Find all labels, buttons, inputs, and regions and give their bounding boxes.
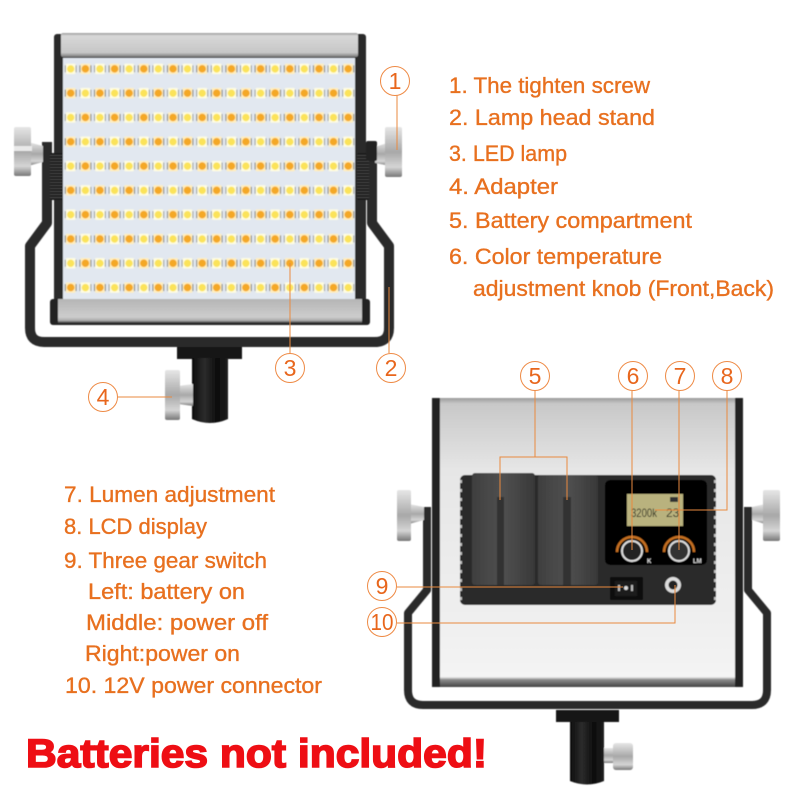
callout 4: 4 <box>97 384 110 410</box>
parts list 7 to 10: Left: battery on <box>88 579 245 604</box>
callout 6: 6 <box>627 363 639 389</box>
battery 2 <box>538 475 598 585</box>
back panel <box>432 398 743 687</box>
batteries warning: Batteries not included! <box>26 732 487 776</box>
scalloped box edges <box>461 480 715 600</box>
callout 6 <box>618 362 648 390</box>
parts list 1 to 6 <box>449 73 774 301</box>
three gear switch <box>610 577 643 600</box>
callout 9 <box>368 572 396 600</box>
callout 2: 2 <box>385 355 397 381</box>
callout 7: 7 <box>674 363 686 389</box>
parts list 1 to 6: 4. Adapter <box>449 174 558 199</box>
back left screw <box>397 490 424 541</box>
back U-shaped stand <box>408 507 767 705</box>
callout 4 <box>88 382 118 412</box>
bottom silver bar <box>50 299 370 325</box>
parts list 7 to 10: Right:power on <box>85 641 240 666</box>
callout 9: 9 <box>376 573 388 599</box>
lumen knob <box>664 537 702 565</box>
back adapter knob <box>604 743 633 770</box>
mount block <box>556 710 619 722</box>
callout lines <box>118 95 727 623</box>
parts list 7 to 10: Middle: power off <box>86 610 269 635</box>
control panel <box>605 480 707 565</box>
parts list 1 to 6: 5. Battery compartment <box>449 208 692 233</box>
parts list 1 to 6: adjustment knob (Front,Back) <box>473 276 774 301</box>
callout 3 <box>276 354 304 382</box>
parts list 7 to 10: 7. Lumen adjustment <box>64 482 275 507</box>
callout 1: 1 <box>389 68 401 94</box>
parts list 1 to 6: 3. LED lamp <box>449 141 567 166</box>
battery 1 <box>472 473 535 585</box>
front panel frame <box>54 34 366 324</box>
back view of LED light <box>397 398 780 784</box>
callout 3: 3 <box>284 355 296 381</box>
ratchet left <box>50 153 63 200</box>
left tighten screw <box>14 127 43 176</box>
callout 2 <box>376 354 406 382</box>
callout 8: 8 <box>721 363 733 389</box>
mount tube <box>570 722 604 784</box>
LCD display: 3200k <box>631 506 658 520</box>
parts list 1 to 6: 2. Lamp head stand <box>449 105 655 130</box>
mount block <box>177 347 242 359</box>
control box <box>460 475 716 605</box>
LED board <box>63 58 355 299</box>
callout 8 <box>712 362 742 390</box>
callout 7 <box>666 362 694 390</box>
parts list 7 to 10: 10. 12V power connector <box>65 673 322 698</box>
right tighten screw <box>366 127 402 177</box>
lumen knob: LM <box>693 559 702 565</box>
LED array <box>63 57 355 300</box>
parts list 7 to 10: 9. Three gear switch <box>64 548 267 573</box>
parts list 1 to 6: 1. The tighten screw <box>449 73 650 98</box>
front view of LED light <box>14 33 402 423</box>
LCD display <box>627 494 683 526</box>
callout 1 <box>380 66 410 96</box>
front U-shaped stand <box>30 142 389 342</box>
parts list 1 to 6: 6. Color temperature <box>449 244 662 269</box>
callout 5: 5 <box>529 363 541 389</box>
callout 5 <box>520 362 550 390</box>
mount tube <box>192 358 228 423</box>
callout 10: 10 <box>370 609 394 635</box>
12V power connector <box>665 577 681 593</box>
colour temperature knob <box>617 537 652 565</box>
adapter knob <box>165 370 193 420</box>
top silver bar <box>61 33 358 57</box>
colour temperature knob: K <box>647 559 652 565</box>
ratchet right <box>357 153 369 200</box>
LCD display: 23 <box>666 506 680 520</box>
parts list 7 to 10: 8. LCD display <box>64 514 207 539</box>
back right screw <box>752 490 780 541</box>
parts list 7 to 10 <box>64 482 322 698</box>
